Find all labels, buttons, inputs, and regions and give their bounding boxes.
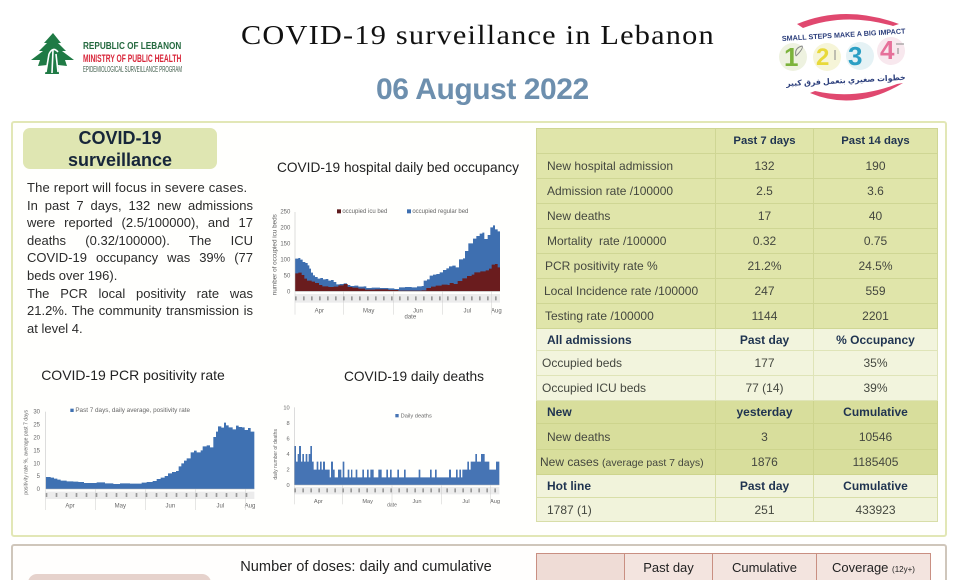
chart: PCR positivity rate: Apr — [65, 503, 75, 509]
table: surveillance indicators: Admission rate /100000 — [547, 184, 673, 198]
title: COVID-19 surveillance in Lebanon — [241, 19, 715, 50]
table: surveillance indicators: 1876 — [751, 455, 778, 469]
table: surveillance indicators: New cases (average past 7 days) — [540, 455, 704, 469]
vaccination heading pill — [28, 574, 211, 580]
icon: cedar tree — [31, 33, 74, 74]
text block: report summary: In past 7 days, 132 new admissions — [27, 198, 253, 213]
chart: daily deaths: 4 — [287, 452, 290, 458]
chart: PCR positivity rate: Jul — [216, 503, 224, 509]
chart: hospital daily bed occupancy: 50 — [284, 273, 291, 279]
chart: hospital daily bed occupancy: number of occupied icu beds — [272, 214, 279, 295]
chart: daily deaths: 6 — [287, 436, 290, 442]
table: surveillance indicators: 77 (14) — [745, 381, 784, 395]
date heading: 06 August 2022 — [376, 73, 589, 106]
heading pill: COVID-19 surveillance: COVID-19 — [78, 128, 162, 148]
table: surveillance indicators: 1144 — [752, 309, 777, 323]
chart: PCR positivity rate: Past 7 days, daily average, positivity rate — [75, 407, 190, 414]
chart: PCR positivity rate: 20 — [33, 436, 41, 442]
table: surveillance indicators: % Occupancy — [836, 332, 915, 346]
logo text: MINISTRY OF PUBLIC HEALTH — [83, 53, 181, 65]
table: surveillance indicators: Cumulative — [843, 405, 908, 419]
chart: hospital daily bed occupancy: Jul — [463, 308, 471, 314]
chart: daily deaths: 2 — [287, 467, 290, 473]
table: surveillance indicators: 35% — [863, 356, 888, 370]
chart: daily deaths: 10 — [283, 405, 290, 411]
chart: PCR positivity rate: 25 — [33, 423, 41, 429]
chart: PCR positivity rate: positivity rate %, average past 7 days — [24, 409, 30, 495]
chart: hospital daily bed occupancy: Apr — [315, 308, 324, 314]
chart: hospital daily bed occupancy: 0 — [287, 289, 291, 295]
text block: report summary: COVID-19 occupancy was 39% (77 — [27, 250, 253, 265]
logo: small steps make a big impact: 1 — [784, 42, 798, 72]
heading pill: COVID-19 surveillance: surveillance — [68, 150, 172, 170]
table: surveillance indicators: 21.2% — [747, 259, 782, 273]
table: surveillance indicators: 0.75 — [864, 234, 887, 248]
logo text: REPUBLIC OF LEBANON — [83, 40, 181, 52]
table: surveillance indicators: 1787 (1) — [547, 502, 592, 516]
chart title: hospital bed occupancy: COVID-19 hospital daily bed occupancy — [277, 160, 519, 175]
text block: report summary: were reported (2.5/100000), and 17 — [27, 215, 253, 230]
text block: report summary: 21.2%. The community transmission is — [27, 303, 253, 318]
table: surveillance indicators: 247 — [754, 284, 775, 298]
chart: PCR positivity rate: 0 — [37, 487, 41, 493]
chart: hospital daily bed occupancy: 200 — [280, 226, 291, 232]
text: number of doses heading: Number of doses: daily and cumulative — [240, 559, 492, 575]
table: surveillance indicators: PCR positivity rate % — [545, 259, 658, 273]
table: surveillance indicators: Occupied ICU beds — [542, 381, 646, 395]
chart: daily deaths: Apr — [314, 499, 323, 505]
text block: report summary: at level 4. — [27, 321, 83, 336]
chart: daily deaths: May — [362, 499, 373, 505]
table: surveillance indicators: 2.5 — [756, 184, 773, 198]
text block: report summary: beds over 196). — [27, 268, 117, 283]
table: surveillance indicators: yesterday — [736, 405, 793, 419]
table: surveillance indicators: Occupied beds — [542, 356, 622, 370]
logo: small steps make a big impact: خطوات صغيري بتعمل فرق كبير — [785, 73, 906, 88]
chart title: PCR positivity: COVID-19 PCR positivity rate — [41, 367, 225, 383]
chart: PCR positivity rate: 10 — [33, 461, 41, 467]
table: surveillance indicators: 190 — [865, 159, 886, 173]
table: surveillance indicators: Past 14 days — [841, 135, 910, 147]
logo: small steps make a big impact — [779, 14, 906, 100]
chart: hospital daily bed occupancy: occupied icu bed — [342, 209, 387, 215]
chart: PCR positivity rate — [24, 407, 255, 510]
logo: Ministry of Public Health — [31, 33, 182, 74]
table: surveillance indicators: Past 7 days — [733, 135, 796, 147]
chart: daily deaths — [273, 405, 500, 509]
table: surveillance indicators: 559 — [865, 284, 886, 298]
table: surveillance indicators: 24.5% — [858, 259, 893, 273]
chart: PCR positivity rate: 5 — [37, 474, 41, 480]
table: surveillance indicators: New deaths — [547, 430, 610, 444]
text block: report summary — [27, 180, 253, 336]
logo text — [83, 40, 182, 74]
chart: PCR positivity rate: 15 — [33, 448, 41, 454]
panel: surveillance — [11, 121, 947, 537]
table: surveillance indicators: 3 — [761, 430, 768, 444]
table: surveillance indicators: 251 — [754, 502, 775, 516]
table: surveillance indicators: 1185405 — [853, 455, 898, 469]
table: surveillance indicators: 0.32 — [753, 234, 776, 248]
chart: hospital daily bed occupancy: Jun — [413, 308, 423, 314]
chart: hospital daily bed occupancy: 250 — [280, 210, 291, 216]
chart: hospital daily bed occupancy: 150 — [280, 242, 291, 248]
chart: hospital daily bed occupancy: occupied regular bed — [412, 209, 468, 215]
table: surveillance indicators: 39% — [863, 381, 888, 395]
chart: daily deaths: 0 — [287, 483, 290, 489]
text block: report summary: deaths (0.32/100000). The ICU — [27, 233, 253, 248]
heading pill: COVID-19 surveillance — [23, 128, 217, 169]
logo: small steps make a big impact: 4 — [880, 35, 895, 65]
chart: hospital daily bed occupancy: date — [404, 315, 417, 321]
chart: PCR positivity rate: 30 — [33, 410, 41, 416]
chart: daily deaths: date — [387, 503, 397, 509]
table: surveillance indicators: 40 — [869, 209, 882, 223]
table: surveillance indicators — [536, 128, 938, 522]
chart: daily deaths: Jun — [412, 499, 422, 505]
logo: small steps make a big impact: 2 — [816, 44, 829, 71]
table: surveillance indicators: New — [547, 405, 572, 419]
chart: hospital daily bed occupancy: May — [363, 308, 374, 314]
text block: report summary: The report will focus in severe cases. — [27, 180, 247, 195]
table: surveillance indicators: 17 — [758, 209, 771, 223]
table: vaccination doses: Cumulative — [732, 560, 797, 574]
chart: hospital daily bed occupancy — [272, 208, 502, 321]
table: surveillance indicators: Cumulative — [843, 479, 908, 493]
table: surveillance indicators: All admissions — [547, 332, 632, 346]
logo: small steps make a big impact: SMALL STEPS MAKE A BIG IMPACT — [782, 26, 906, 43]
chart: daily deaths: daily number of deaths — [273, 429, 279, 480]
table: surveillance indicators: 132 — [754, 159, 775, 173]
chart: daily deaths: 8 — [287, 421, 290, 427]
table: surveillance indicators: Local Incidence rate /100000 — [544, 284, 698, 298]
table: surveillance indicators: Mortality rate /100000 — [547, 234, 666, 248]
text block: report summary: The PCR local positivity rate was — [27, 286, 253, 301]
table: surveillance indicators: Hot line — [547, 479, 591, 493]
chart: PCR positivity rate: Aug — [245, 503, 255, 509]
chart: daily deaths: Jul — [462, 499, 470, 505]
table: surveillance indicators: Testing rate /100000 — [545, 309, 654, 323]
table: surveillance indicators: New hospital admission — [547, 159, 673, 173]
table: surveillance indicators: 177 — [754, 356, 775, 370]
chart: PCR positivity rate: Jun — [165, 503, 175, 509]
table: surveillance indicators: New deaths — [547, 209, 610, 223]
panel: vaccination — [11, 544, 947, 580]
chart: hospital daily bed occupancy: 100 — [280, 257, 291, 263]
table: vaccination doses — [536, 553, 931, 580]
table: surveillance indicators: 2201 — [862, 309, 889, 323]
chart: daily deaths: Daily deaths — [401, 413, 432, 419]
table: surveillance indicators: Past day — [740, 332, 789, 346]
table: surveillance indicators: Past day — [740, 479, 789, 493]
table: surveillance indicators: 10546 — [859, 430, 892, 444]
table: surveillance indicators: 3.6 — [867, 184, 884, 198]
logo text: EPIDEMIOLOGICAL SURVEILLANCE PROGRAM — [83, 65, 182, 74]
chart: daily deaths: Aug — [490, 499, 500, 505]
chart: hospital daily bed occupancy: Aug — [491, 308, 502, 314]
logo: small steps make a big impact: 3 — [848, 41, 862, 71]
table: vaccination doses: Past day — [643, 560, 694, 574]
table: vaccination doses: Coverage (12y+) — [832, 560, 915, 574]
chart title: daily deaths: COVID-19 daily deaths — [344, 369, 484, 384]
chart: PCR positivity rate: May — [115, 503, 126, 509]
table: surveillance indicators: 433923 — [855, 502, 896, 516]
